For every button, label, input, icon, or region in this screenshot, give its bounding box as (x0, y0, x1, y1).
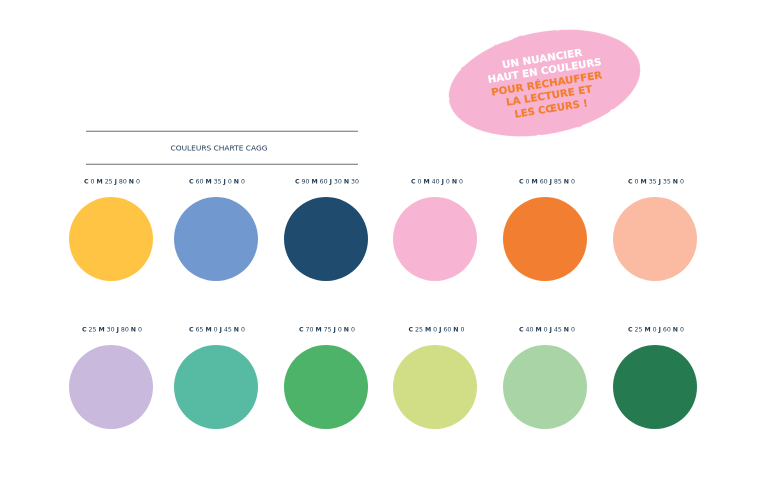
swatch: peach (613, 178, 697, 281)
slogan text: UN NUANCIER (501, 48, 583, 71)
slogan text: POUR RÉCHAUFFER (490, 68, 603, 99)
blob shape (440, 14, 649, 152)
swatch: lime: C 25 M 0 J 60 N 0 (408, 326, 465, 333)
swatch: sage (503, 326, 587, 429)
slogan text (487, 48, 603, 121)
swatch: pink (393, 178, 477, 281)
callout: pink blob with slogan (440, 14, 649, 152)
swatch: teal: C 65 M 0 J 45 N 0 (189, 326, 245, 333)
swatch: lime (393, 326, 477, 429)
heading: couleurs charte CAGG: COULEURS CHARTE CAGG (170, 144, 268, 152)
swatch: orange (503, 178, 587, 281)
swatch: green (284, 326, 368, 429)
swatch: navy: C 90 M 60 J 30 N 30 (295, 178, 359, 185)
swatch: sage: C 40 M 0 J 45 N 0 (519, 326, 575, 333)
swatch: lilac (69, 326, 153, 429)
swatch: teal (174, 326, 258, 429)
slogan text: LA LECTURE ET (505, 84, 593, 109)
swatch: dark green: C 25 M 0 J 60 N 0 (628, 326, 684, 333)
swatch: blue: C 60 M 35 J 0 N 0 (189, 178, 245, 185)
swatch: yellow (69, 178, 153, 281)
swatch: yellow: C 0 M 25 J 80 N 0 (84, 178, 140, 185)
slogan text: HAUT EN COULEURS (487, 57, 602, 86)
swatch: dark green (613, 326, 697, 429)
swatch: blue (174, 178, 258, 281)
swatch: lilac: C 25 M 30 J 80 N 0 (82, 326, 142, 333)
swatch: navy (284, 178, 368, 281)
swatch: orange: C 0 M 60 J 85 N 0 (519, 178, 575, 185)
slogan text: LES CŒURS ! (514, 98, 589, 121)
swatch: peach: C 0 M 35 J 35 N 0 (628, 178, 684, 185)
swatch: pink: C 0 M 40 J 0 N 0 (411, 178, 463, 185)
swatch: green: C 70 M 75 J 0 N 0 (299, 326, 355, 333)
